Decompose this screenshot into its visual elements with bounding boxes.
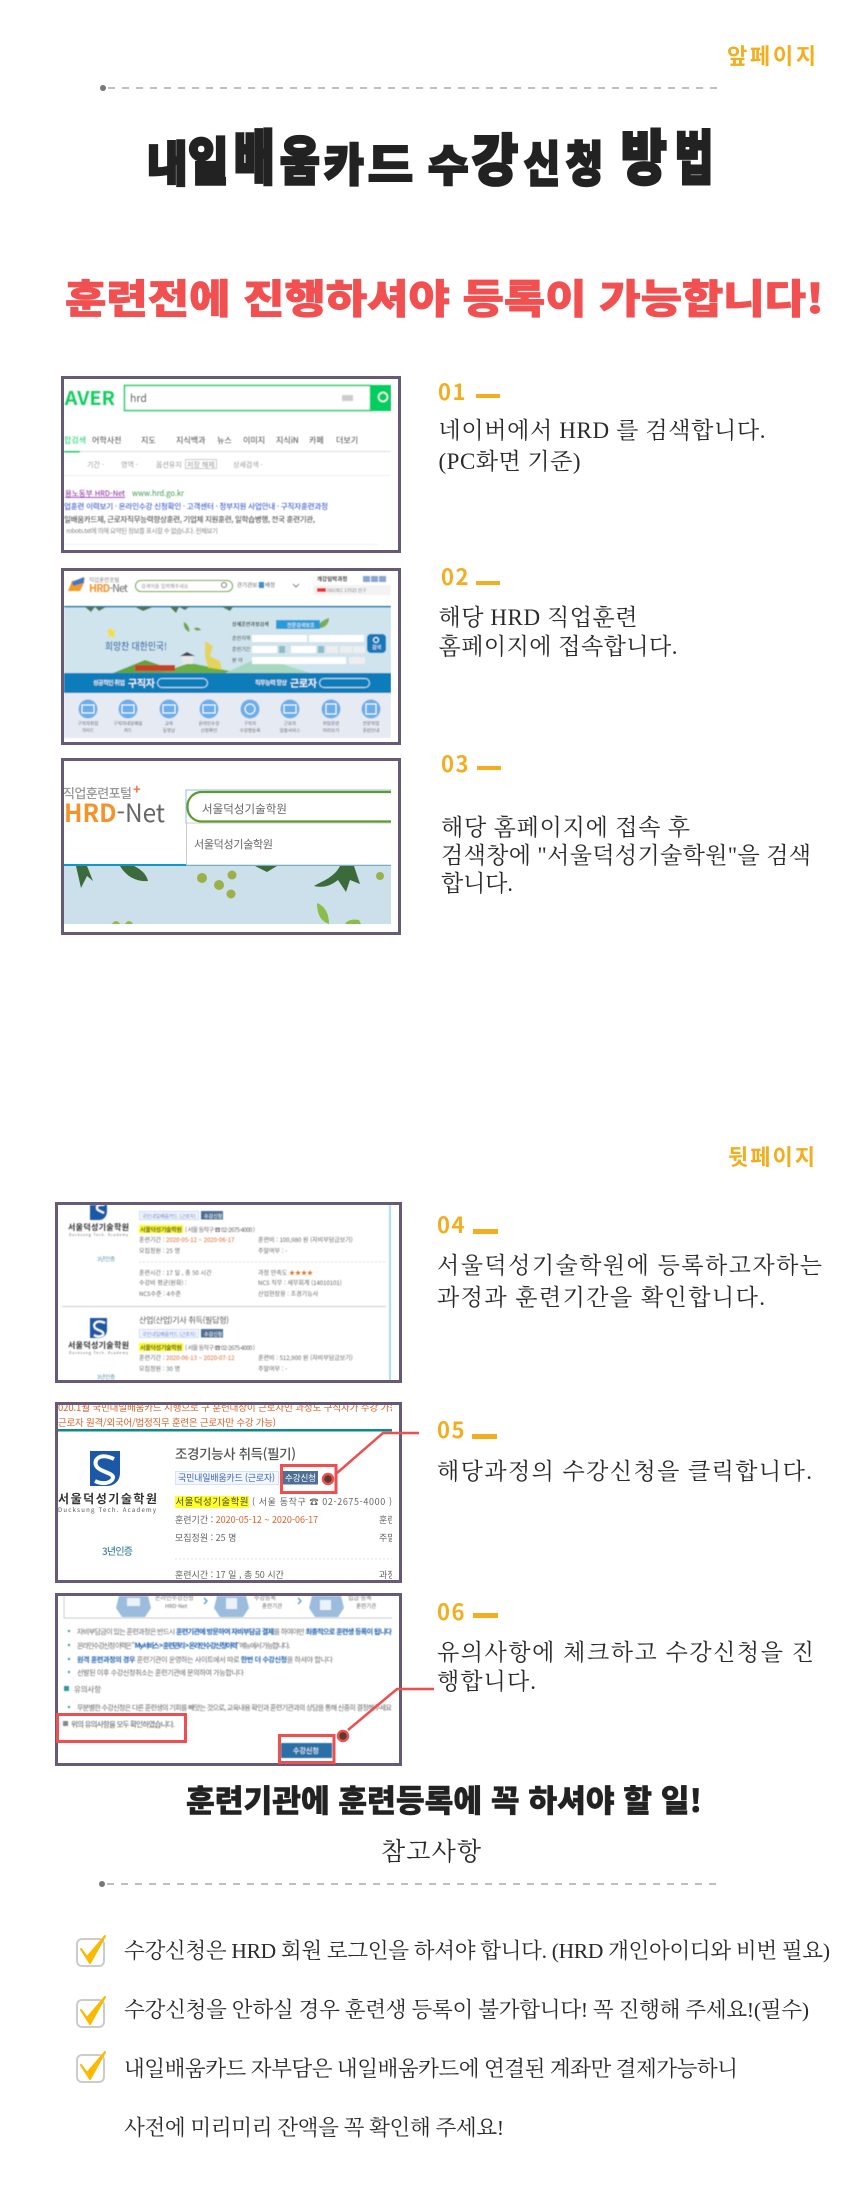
step 03: 03: [441, 747, 470, 779]
screenshot 2: HRD-Net homepage: [61, 568, 401, 745]
course tag and apply button: [176, 1471, 318, 1484]
icon: check: [77, 1997, 105, 2027]
screenshot 6: notice and agreement: [55, 1593, 434, 1766]
search result: 업훈련 이력보기 · 온라인수강 신청확인 · 고객센터 · 정부지원 사업안내 · 구직자훈련과정: [64, 501, 328, 512]
dropdown suggestion: 서울덕성기술학원: [194, 836, 273, 852]
title: 드: [368, 130, 413, 194]
blue band: 구직자: [128, 675, 155, 690]
apply button: [281, 1743, 332, 1758]
course 1 details: 서울덕성기술학원: [140, 1225, 182, 1234]
step 03 text: 검색창에 "서울덕성기술학원"을 검색: [441, 843, 811, 868]
course search form: 훈련기간: [232, 646, 251, 653]
step 04: 04: [437, 1208, 466, 1240]
course title: 조경기능사 취득(필기): [175, 1443, 296, 1463]
notice bullets: 유의사항: [74, 1684, 101, 1695]
process header: [64, 1593, 392, 1618]
option row: 저장 해제: [187, 460, 215, 470]
course 1 details: 수강신청: [204, 1213, 222, 1220]
notice text: 근로자 원격/외국어/법정직무 훈련은 근로자만 수강 가능): [58, 1415, 276, 1429]
dropdown suggestion: [186, 823, 396, 865]
title: 청: [566, 126, 603, 195]
course 1 details: 과정 만족도 ★★★★: [258, 1268, 313, 1277]
course 1 details: 산업현장용 : 조경기능사: [258, 1289, 319, 1298]
logo: course 2: [68, 1318, 129, 1381]
blue band: 직무능력 향상: [255, 678, 287, 687]
course 2 details: 수강신청: [204, 1331, 222, 1338]
blue band: [64, 673, 391, 693]
course 2 details: [139, 1315, 353, 1373]
icon row: 동영상: [163, 727, 175, 734]
top right info: 배정: [265, 581, 275, 589]
logo: course 1: 서울덕성기술학원: [68, 1222, 129, 1233]
checklist item 3 text: 내일배움카드 자부담은 내일배움카드에 연결된 계좌만 결제가능하니: [124, 2057, 738, 2081]
label: front page: 앞페이지: [727, 39, 816, 71]
title: 수: [428, 133, 468, 194]
course tag and apply button: 수강신청: [285, 1472, 316, 1484]
search tabs: 뉴스: [217, 435, 232, 446]
search pill: [136, 580, 232, 592]
course 2 details: 훈련비 : 512,900 원 (자비부담금보기): [258, 1353, 353, 1362]
screenshot 3: search box: [61, 758, 408, 935]
apply button: 수강신청: [293, 1746, 319, 1756]
banner: [64, 864, 391, 924]
step 03 text: 해당 홈페이지에 접속 후: [441, 815, 690, 840]
screenshot 5: course detail: [55, 1400, 419, 1583]
notice bullets: 자비부담금이 있는 훈련과정은 반드시 훈련기관에 방문하여 자비부담금 결제를 하여야만 최종적으로 훈련생 등록이 됩니다: [77, 1627, 393, 1637]
step 04 text: [437, 1253, 822, 1310]
checklist item 2: 수강신청을 안하실 경우 훈련생 등록이 불가합니다! 꼭 진행해 주세요!(필수): [124, 1998, 809, 2022]
course info: 훈련기간 : 2020-05-12 ~ 2020-06-17: [175, 1513, 318, 1526]
course 1 details: 훈련시간 : 17 일 , 총 50 시간: [139, 1268, 212, 1277]
step 01: 01: [438, 375, 467, 407]
step 01: [438, 375, 766, 474]
search tabs: 어학사전: [92, 435, 121, 446]
logo: academy: Ducksung Tech. Academy: [58, 1505, 157, 1514]
icon row: 전문직업: [363, 720, 379, 727]
process header: 훈련기관: [356, 1602, 376, 1610]
logo: course 2: 3년인증: [97, 1373, 115, 1381]
title: 움: [280, 120, 320, 195]
option row: [64, 460, 391, 476]
course 2 details: 모집정원 : 30 명: [139, 1364, 180, 1373]
step 06 text: [437, 1640, 814, 1694]
title: 일: [188, 121, 228, 195]
search result: [64, 488, 378, 545]
course 1 details: [139, 1211, 386, 1298]
icon row: 가이드: [82, 727, 94, 734]
logo: academy: [58, 1451, 157, 1558]
top right info: [237, 575, 391, 595]
search tabs: 이미지: [243, 435, 265, 446]
checklist item 3: [77, 2052, 738, 2140]
course 2 details: 산업(산업)기사 취득(필답형): [139, 1315, 229, 1326]
blue band: 성공적인 취업: [93, 678, 125, 687]
course 1 details: 모집정원 : 25 명: [139, 1246, 180, 1255]
course search form: 상세훈련과정검색: [232, 621, 269, 628]
step 06 text: 유의사항에 체크하고 수강신청을 진: [437, 1640, 814, 1665]
course 1 details: 주말여부 : -: [258, 1246, 287, 1255]
search tabs: [64, 435, 391, 452]
icon row: 신청확인: [201, 727, 217, 734]
icon row: 수강평등록: [240, 727, 260, 734]
logo: HRD-Net small: 직업훈련포털: [89, 576, 119, 584]
process header: 훈련기관: [262, 1602, 282, 1610]
icon row: 취업훈련: [323, 720, 339, 727]
notice bullets: [64, 1627, 393, 1713]
logo: academy: 3년인증: [102, 1543, 133, 1558]
process header: 입금·등록: [348, 1593, 372, 1602]
notice bullets: 원격 훈련과정의 경우 훈련기관이 운영하는 사이트에서 따로 한번 더 수강신청을 하셔야 합니다: [77, 1655, 334, 1665]
blue band: 근로자: [290, 675, 317, 690]
title: 내: [147, 127, 187, 196]
search result: 용노동부 HRD-Net: [65, 488, 125, 499]
step 01 text: 네이버에서 HRD 를 검색합니다.: [438, 418, 766, 443]
checklist item 3 text: 사전에 미리미리 잔액을 꼭 확인해 주세요!: [124, 2116, 504, 2140]
icon row: 교육: [165, 721, 173, 727]
screenshot 4: course list: [55, 1202, 402, 1383]
process header: 수강등록: [254, 1593, 277, 1602]
course 2 details: 국민내일배움카드 (근로자): [142, 1331, 196, 1338]
step 06 text: 행합니다.: [437, 1669, 536, 1694]
notice text: [58, 1405, 392, 1428]
step 05: [437, 1413, 812, 1484]
option row: 기간 ·: [87, 460, 104, 470]
dotted divider top: [100, 85, 719, 91]
top right info: 개강임박과정: [317, 575, 347, 583]
logo: course 1: Ducksung Tech. Academy: [69, 1233, 128, 1238]
label: back page: 뒷페이지: [728, 1140, 815, 1172]
search result: robots.txt에 의해 요약된 정보를 표시할 수 없습니다. 전체보기: [66, 525, 218, 535]
step 02 text: [438, 605, 678, 659]
option row: 옵션유지: [156, 460, 182, 470]
search result: www.hrd.go.kr: [132, 488, 184, 499]
step 02: [438, 560, 678, 659]
notice bullets: 무분별한 수강신청은 다른 훈련생의 기회를 빼앗는 것으로, 교육내용 확인과 훈련기관과의 상담을 통해 신중히 결정해주세요: [77, 1703, 393, 1713]
icon: check: [77, 1936, 105, 1966]
top right info: ISO/IEC 17025 인구: [327, 587, 366, 594]
icon row: 구직자내일배움: [114, 720, 142, 727]
checklist item 1: 수강신청은 HRD 회원 로그인을 하셔야 합니다. (HRD 개인아이디와 비번 필요): [124, 1939, 830, 1963]
step 03 text: 합니다.: [441, 871, 513, 896]
search tabs: 카페: [309, 435, 324, 446]
search tabs: 지식iN: [276, 435, 299, 446]
search tabs: 합검색: [64, 435, 86, 446]
scrollbar: [388, 1205, 391, 1380]
search pill: 검색어를 입력해주세요: [141, 583, 189, 590]
course info: 서울덕성기술학원: [176, 1494, 248, 1508]
checklist item 3 text: [124, 2057, 738, 2140]
step 06: 06: [437, 1595, 466, 1627]
step 05: 05: [437, 1413, 466, 1445]
course info: ( 서울 동작구 ☎ 02-2675-4000 ): [252, 1495, 392, 1508]
step 03: [441, 747, 811, 896]
option row: 상세검색 ·: [233, 460, 263, 470]
hero slogan: 희망찬 대한민국!: [105, 638, 167, 653]
logo: HRD-Net large: +: [133, 779, 141, 798]
logo: HRD-Net large: 직업훈련포털: [63, 783, 132, 802]
logo: course 2: 서울덕성기술학원: [68, 1340, 129, 1351]
search tabs: 지도: [141, 435, 156, 446]
course search form: 훈련지역: [232, 635, 250, 642]
step 01 text: (PC화면 기준): [438, 449, 580, 474]
icon row: [64, 693, 391, 738]
course 2 details: 주말여부 : -: [258, 1364, 287, 1373]
course 2 details: ( 서울 동작구 ☎ 02-2675-4000 ): [185, 1343, 255, 1352]
notice bullets: 선발된 이후 수강신청취소는 훈련기관에 문의하여 가능합니다: [77, 1668, 245, 1678]
search tabs: 지식백과: [176, 435, 206, 446]
icon row: 맞춤서비스: [280, 727, 300, 734]
step 04 text: 과정과 훈련기간을 확인합니다.: [437, 1285, 765, 1310]
hero banner: [64, 606, 391, 673]
title: 배: [234, 112, 274, 197]
step 06: [437, 1595, 814, 1694]
top right info: 관기관보기:: [237, 581, 264, 589]
course search form: 전문검색보조: [287, 622, 315, 629]
callout: apply button: [280, 1689, 434, 1762]
icon row: 카드: [124, 727, 132, 734]
option row: 영역 ·: [121, 460, 138, 470]
notice bullets: 온라인수강신청 이력은 " My서비스 > 훈련관리 > 온라인수강신청이력" 메뉴에서 가능합니다.: [77, 1641, 290, 1651]
course info: 과정: [379, 1568, 396, 1581]
icon: check: [77, 2052, 105, 2082]
heading: required actions: 훈련기관에 훈련등록에 꼭 하셔야 할 일!: [186, 1776, 702, 1821]
course 2 details: 서울덕성기술학원: [140, 1343, 182, 1352]
course search form: 분 야: [232, 657, 243, 664]
logo: course 1: [68, 1205, 129, 1263]
logo: course 1: 3년인증: [97, 1255, 115, 1263]
course search form: 검색: [372, 644, 382, 651]
course tag and apply button: 국민내일배움카드 (근로자): [178, 1471, 275, 1484]
logo: HRD-Net small: HRD-Net: [89, 581, 128, 596]
step 01 text: [438, 418, 766, 474]
logo: naver: NAVER: [50, 384, 115, 411]
course info: 훈련시간 : 17 일 , 총 50 시간: [175, 1568, 284, 1581]
logo: course 2: Ducksung Tech. Academy: [69, 1351, 128, 1356]
process header: 온라인수강신청: [155, 1593, 194, 1602]
title: 카: [324, 129, 364, 194]
logo: HRD-Net large: [64, 786, 164, 822]
search tabs: 더보기: [336, 435, 358, 446]
search result: 일배움카드제, 근로자직무능력향상훈련, 기업체 지원훈련, 일학습병행, 전국 훈련기관,: [64, 514, 315, 525]
icon row: 구직자: [244, 720, 257, 727]
title: 법: [675, 111, 713, 196]
title: 강: [472, 117, 518, 197]
step 02 text: 해당 HRD 직업훈련: [438, 605, 638, 630]
subheading: notes: 참고사항: [381, 1838, 482, 1866]
icon row: 온라인수강: [199, 720, 219, 727]
course 1 details: 국민내일배움카드 (근로자): [142, 1213, 196, 1220]
step 02: 02: [441, 560, 470, 592]
course info: 주말: [379, 1531, 396, 1544]
logo: HRD-Net small: [68, 576, 128, 593]
logo: academy: 서울덕성기술학원: [58, 1490, 157, 1507]
title: 방: [621, 111, 667, 196]
course 1 details: 훈련기간 : 2020-05-12 ~ 2020-06-17: [139, 1235, 235, 1244]
step 02 text: 홈페이지에 접속합니다.: [438, 634, 678, 659]
process header: HRD-Net: [165, 1602, 187, 1610]
step 04: [437, 1208, 822, 1310]
course search form: [232, 618, 386, 664]
course 1 details: 훈련비 : 100,980 원 (자비부담금보기): [258, 1235, 353, 1244]
course 1 details: 수강비 평균(원화) :: [139, 1278, 187, 1287]
logo: HRD-Net large: HRD-Net: [64, 794, 166, 830]
step 05 text: 해당과정의 수강신청을 클릭합니다.: [437, 1459, 812, 1484]
search box: [124, 385, 391, 411]
callout: agreement box: [58, 1714, 186, 1742]
icon row: 미리보기: [323, 727, 339, 734]
course 1 details: NCS 직무 : 세무회계 (14010101): [258, 1278, 342, 1287]
screenshot 1: Naver search: [50, 376, 401, 553]
step 04 text: 서울덕성기술학원에 등록하고자하는: [437, 1253, 822, 1278]
title: [147, 111, 713, 197]
course info: 모집정원 : 25 명: [175, 1531, 236, 1544]
course info: 훈련: [379, 1513, 396, 1526]
dotted divider bottom: [99, 1881, 718, 1887]
course 1 details: ( 서울 동작구 ☎ 02-2675-4000 ): [185, 1225, 255, 1234]
course info: [175, 1494, 396, 1581]
notice text: 020.1월 국민내일배움카드 시행으로 구 훈련대상이 근로자인 과정도 구직자가 수강 가능: [58, 1400, 398, 1414]
warning heading: 훈련전에 진행하셔야 등록이 가능합니다!: [65, 267, 824, 325]
title: 신: [524, 125, 560, 195]
search input: [186, 790, 408, 823]
icon row: 근로자: [284, 720, 297, 727]
agreement checkbox: 위의 유의사항을 모두 확인하였습니다.: [71, 1719, 175, 1730]
search input: 서울덕성기술학원: [202, 801, 287, 817]
icon row: 훈련안내: [363, 727, 379, 734]
course 1 details: NCS수준 : 4수준: [139, 1289, 182, 1298]
callout: apply button: [282, 1433, 419, 1492]
search box: hrd: [130, 391, 147, 406]
icon row: 구직자취업: [78, 720, 98, 727]
course 2 details: 훈련기간 : 2020-06-13 ~ 2020-07-12: [139, 1353, 235, 1362]
step 03 text: [441, 815, 811, 896]
